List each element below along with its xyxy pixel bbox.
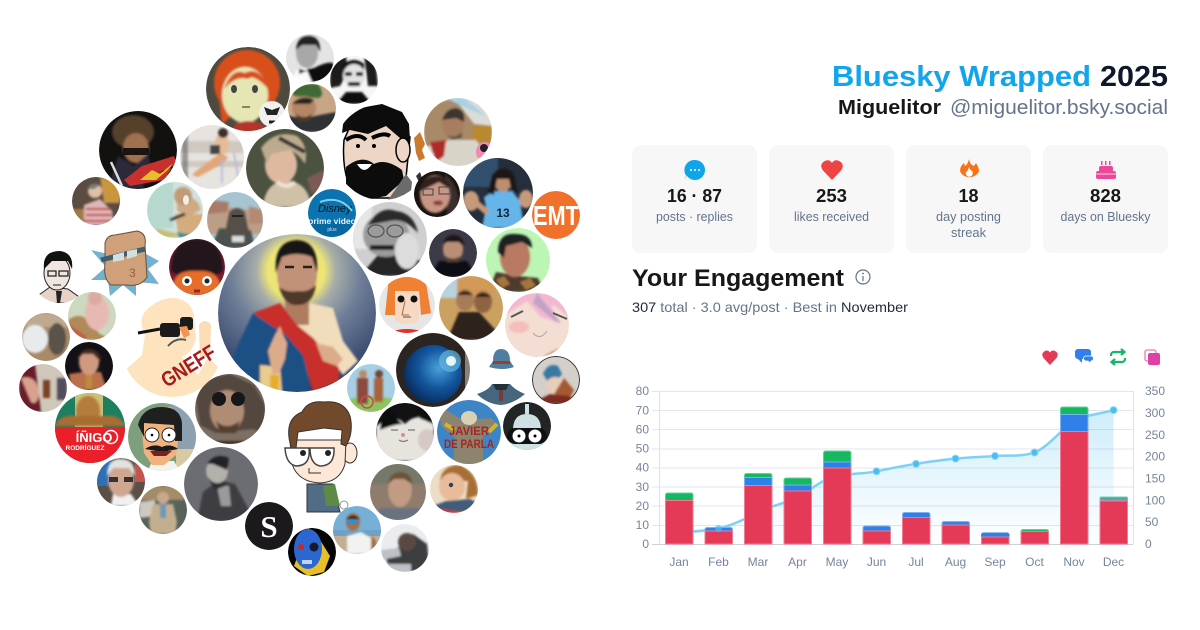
- avatar: saint portrait (largest): [218, 234, 376, 392]
- avatar: man with glass and pink badge: [424, 98, 494, 166]
- icon: info: [856, 270, 870, 284]
- left axis labels: 0: [642, 537, 649, 551]
- avatar: orange-haired comic: [379, 277, 435, 333]
- icon: quote legend: [1145, 350, 1160, 365]
- avatar: man in tuxedo: [286, 34, 334, 82]
- bar: Feb: [705, 525, 732, 544]
- avatar: game characters: [347, 364, 395, 412]
- avatar: comic man with glasses and scarf: [285, 402, 357, 512]
- combo chart: monthly engagement and cumulative total: [636, 384, 1165, 569]
- month labels: Dec: [1103, 555, 1124, 569]
- bar: Dec: [1100, 497, 1128, 544]
- stat card: days on Bluesky: 828: [1090, 186, 1121, 206]
- avatar: paper-bag head with burst: [91, 231, 159, 296]
- right axis labels: 150: [1145, 472, 1165, 486]
- icon: speech bubble: [684, 160, 705, 180]
- bar: Mar: [744, 474, 772, 544]
- avatar: hand and doorway: [19, 364, 67, 412]
- avatar: drawing of man with glasses: [40, 251, 78, 303]
- avatar: invisible man with hat: [477, 349, 525, 405]
- right axis labels: 250: [1145, 428, 1165, 442]
- legend icons: [1042, 349, 1160, 365]
- bar: May: [824, 451, 851, 544]
- stat card: posts and replies: posts · replies: [656, 210, 733, 224]
- avatar: red-haired anime girl: [206, 47, 290, 133]
- avatar: man among plants: [288, 84, 336, 132]
- avatar: person pulling a smile: [65, 342, 113, 390]
- left axis labels: 70: [636, 404, 649, 418]
- month labels: Nov: [1063, 555, 1085, 569]
- stat card: day posting streak: 18: [958, 186, 978, 206]
- avatar: streaming service logo: Disney: [318, 203, 353, 215]
- month labels: Apr: [788, 555, 807, 569]
- avatar: smiling man: [370, 464, 426, 520]
- bar: Oct: [1021, 530, 1048, 544]
- left axis labels: 30: [636, 480, 649, 494]
- avatar: couple in old frame: [439, 276, 503, 340]
- title: Bluesky Wrapped 2025: Bluesky Wrapped: [832, 61, 1091, 93]
- avatar: cartoon restaurant owner: [128, 403, 196, 471]
- cumulative area: [679, 410, 1114, 544]
- avatar: orange rock superhero logo: [55, 393, 125, 463]
- avatar: chimpanzee: [381, 524, 429, 572]
- avatar: helmeted pilot: [532, 356, 580, 404]
- avatar: gnome with sunglasses GNEFF: GNEFF: [157, 341, 220, 392]
- avatar: JAVIER DE PARLA: JAVIER: [449, 424, 489, 438]
- right axis labels: 300: [1145, 406, 1165, 420]
- engagement summary: 307 total · 3.0 avg/post · Best in November: [632, 299, 908, 315]
- stat card: likes received: [769, 145, 894, 253]
- stat card: day posting streak: streak: [951, 226, 987, 240]
- bar: Sep: [982, 533, 1009, 544]
- left axis labels: 20: [636, 499, 649, 513]
- avatar: paper-bag head with burst: 3: [129, 266, 136, 280]
- avatar: pink-haired anime face: [505, 293, 569, 357]
- avatar: woman in striped shirt: [72, 177, 120, 225]
- heading: Your Engagement: Your Engagement: [632, 265, 844, 292]
- profile name and handle: @miguelitor.bsky.social: [950, 97, 1168, 119]
- icon: heart: [821, 160, 843, 180]
- avatar: long-bearded man: [207, 192, 263, 248]
- avatar: long-haired man with round sunglasses: [195, 374, 265, 444]
- month labels: Jul: [908, 555, 924, 569]
- avatar: JAVIER DE PARLA: DE PARLA: [444, 437, 494, 451]
- month labels: Oct: [1025, 555, 1044, 569]
- avatar cloud: [19, 34, 580, 576]
- avatar: older man sitting on couch: [139, 486, 187, 534]
- avatar: streaming service logo: plus: [327, 227, 337, 233]
- avatar: older man with glasses: [97, 458, 145, 506]
- left axis labels: 60: [636, 422, 649, 436]
- left axis labels: 40: [636, 460, 649, 474]
- avatar: robot eyes: [503, 402, 551, 450]
- bar: Nov: [1060, 407, 1088, 544]
- left axis labels: 80: [636, 384, 649, 398]
- title: Bluesky Wrapped 2025: 2025: [1100, 61, 1168, 93]
- stat card: day posting streak: day posting: [936, 210, 1001, 224]
- bar: Jul: [902, 512, 930, 544]
- month labels: [669, 555, 1124, 569]
- avatar: boy in checked shirt: [430, 465, 478, 513]
- avatar: footballer with number 13: 13: [496, 206, 510, 220]
- grid lines: [652, 391, 1134, 544]
- right axis labels: 200: [1145, 450, 1165, 464]
- icon: flame: [960, 159, 979, 177]
- icon: replies legend: [1075, 349, 1094, 363]
- avatar: pig on blanket: [68, 291, 116, 342]
- avatar: man on telephone: [147, 182, 203, 238]
- profile name and handle: Miguelitor: [838, 97, 941, 119]
- avatar: streaming service logo: [308, 189, 356, 237]
- avatar: white and tabby cats: [22, 313, 70, 361]
- right axis labels: [1145, 384, 1165, 551]
- avatar: regency woman portrait: [246, 129, 324, 207]
- bar: Jun: [863, 526, 890, 544]
- avatar: EMT logo: EMT: [533, 200, 579, 231]
- cumulative line: [679, 407, 1117, 532]
- avatar: man on green background: [486, 228, 550, 292]
- right axis labels: 50: [1145, 515, 1159, 529]
- month labels: Mar: [748, 555, 768, 569]
- avatar: moustached man black and white photo: [353, 202, 427, 276]
- avatar: bearded comic self-portrait: [342, 104, 425, 200]
- stacked bars: [666, 407, 1128, 544]
- avatar: blue skull: [288, 528, 336, 576]
- stat card: day posting streak: [906, 145, 1031, 253]
- avatar: gnome with sunglasses GNEFF: [122, 297, 222, 397]
- month labels: May: [826, 555, 848, 569]
- profile name and handle: [838, 97, 1168, 119]
- stat card: likes received: likes received: [794, 210, 869, 224]
- avatar: vintage engraving man: [184, 447, 258, 521]
- avatar: orange masked character: [169, 239, 225, 295]
- right axis labels: 100: [1145, 494, 1165, 508]
- bar: Aug: [942, 522, 970, 544]
- avatar: footballer with number 13: [463, 158, 533, 228]
- month labels: Jan: [669, 555, 689, 569]
- bar: Apr: [784, 478, 812, 544]
- avatar: sketch of seated woman: [180, 125, 244, 189]
- month labels: Jun: [867, 555, 886, 569]
- stat card: posts and replies: 16 · 87: [667, 186, 722, 206]
- left axis labels: 50: [636, 442, 649, 456]
- stat card: likes received: 253: [816, 186, 847, 206]
- avatar: orange rock superhero logo: RODRÍGUEZ: [66, 443, 105, 452]
- left axis labels: [636, 384, 649, 551]
- avatar: black S logo: [245, 502, 293, 550]
- right axis labels: 0: [1145, 537, 1152, 551]
- avatar: man with blue sunglasses on beach: [333, 506, 381, 554]
- left axis labels: 10: [636, 518, 649, 532]
- month labels: Sep: [984, 555, 1006, 569]
- avatar: JAVIER DE PARLA: [437, 400, 501, 464]
- stat card: posts and replies: [632, 145, 757, 253]
- avatar: woman with glasses: [414, 171, 460, 217]
- right axis labels: 350: [1145, 384, 1165, 398]
- stat card: days on Bluesky: days on Bluesky: [1060, 210, 1151, 224]
- avatar: man with dark hair and sunglasses: [99, 111, 177, 189]
- avatar: orange rock superhero logo: ÍÑIGO: [76, 430, 112, 445]
- avatar: streaming service logo: prime video: [308, 216, 356, 226]
- bar: Jan: [666, 493, 693, 544]
- month labels: Aug: [945, 555, 966, 569]
- icon: cake: [1096, 161, 1116, 179]
- icon: heart legend: [1042, 350, 1058, 365]
- avatar: man with round glasses sketch: [330, 56, 378, 104]
- icon: repost legend: [1111, 349, 1125, 365]
- avatar: blue orb: [396, 333, 470, 407]
- month labels: Feb: [708, 555, 729, 569]
- avatar: man in black shirt: [429, 229, 477, 277]
- avatar: white cat: [376, 402, 436, 461]
- avatar: EMT logo: [532, 191, 580, 239]
- avatar: black S logo: S: [260, 509, 278, 544]
- stat card: days on Bluesky: [1043, 145, 1168, 253]
